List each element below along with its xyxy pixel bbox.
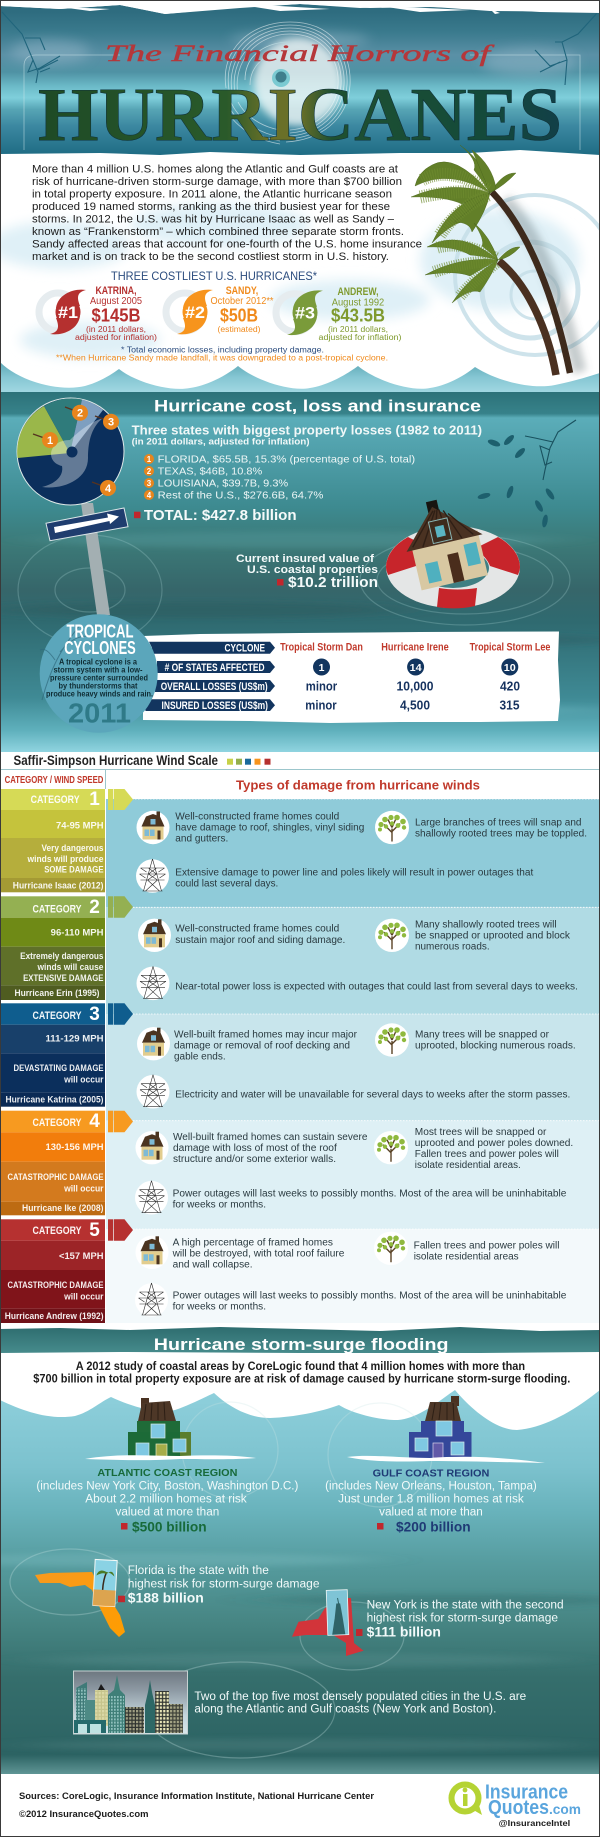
text block: populated cities: along the Atlantic and Gulf coasts (New York and Boston).: [194, 1704, 496, 1716]
panel: Katrina: [39, 285, 157, 342]
copyright: ©2012 InsuranceQuotes.com: [19, 1809, 148, 1819]
panel: category 5: [0, 1219, 600, 1326]
text: tree damage: shallowly rooted trees may be toppled.: [415, 828, 587, 839]
panel: footer: [0, 1774, 600, 1837]
text: power damage: [175, 867, 534, 889]
category 1 sidebar: SOME DAMAGE: [44, 865, 104, 875]
text: tree damage: [415, 1127, 573, 1171]
panel: storm-surge flooding: [0, 1323, 600, 1775]
category 5 sidebar: CATASTROPHIC DAMAGE: [8, 1280, 104, 1290]
category 2 sidebar: CATEGORY: [32, 903, 82, 915]
text: homes damage: and wall collapse.: [173, 1260, 253, 1271]
callout: insured value: [236, 553, 378, 591]
icon: sign post: [81, 503, 110, 615]
text: power damage: could last several days.: [175, 878, 278, 889]
table row: insured losses: [145, 697, 520, 712]
table row: insured losses: INSURED LOSSES (US$m): [162, 700, 268, 712]
category 2 sidebar: 96-110 MPH: [51, 928, 104, 938]
callout: insured value: Current insured value of: [236, 553, 374, 565]
panel: category 3: [0, 1003, 600, 1121]
category 3 sidebar: [0, 1003, 133, 1107]
top torn paper edge: [0, 0, 600, 14]
icon: cyclone overlay: [42, 418, 103, 488]
title script line: The Financial Horrors of: [105, 41, 496, 66]
text block: populated cities: Two of the top five most densely populated cities in the U.S. are: [194, 1691, 526, 1703]
panel: intro background: [0, 195, 600, 358]
icon: palm trees: [411, 145, 580, 375]
chart: pie of property losses: [17, 398, 124, 505]
pin 1: 1: [47, 435, 53, 447]
icon: house: [136, 1236, 168, 1269]
text: homes damage: Well-built framed homes can sustain severe: [173, 1132, 368, 1143]
text block: Gulf coast region: (includes New Orleans, Houston, Tampa): [325, 1481, 537, 1493]
logo: InsuranceQuotes: [452, 1781, 581, 1828]
text block: New York risk: [356, 1599, 564, 1640]
text block: three states: [132, 422, 482, 446]
category 3 sidebar: DEVASTATING DAMAGE: [14, 1063, 104, 1073]
text: homes damage: A high percentage of framed homes: [173, 1238, 333, 1249]
item 1: 1: [147, 455, 152, 464]
text block: New York risk: highest risk for storm-surge damage: [367, 1612, 558, 1624]
icon: house: [136, 1131, 168, 1164]
text block: introduction: Sandy affected areas that account for one-fourth of the U.S. home insurance: [32, 238, 422, 250]
heading: Saffir-Simpson wind scale: Saffir-Simpson Hurricane Wind Scale: [14, 753, 218, 768]
text block: introduction: market and is on track to be the second costliest storm in U.S. history.: [32, 251, 389, 263]
category 3 sidebar: Hurricane Katrina (2005): [6, 1095, 104, 1105]
panel: Andrew: adjusted for inflation): [318, 333, 402, 342]
category 2 sidebar: [0, 896, 133, 1000]
text block: introduction: More than 4 million U.S. homes along the Atlantic and Gulf coasts are at: [32, 164, 398, 176]
item 4: 4: [147, 491, 152, 500]
panel: wind scale white background: [0, 752, 600, 1332]
table row: overall losses: minor: [306, 679, 337, 694]
text: homes damage: damage with loss of most of the roof: [173, 1143, 337, 1154]
category 2 sidebar: winds will cause: [37, 962, 104, 972]
text block: Gulf coast region: valued at more than: [379, 1507, 483, 1519]
text: tree damage: Many trees will be snapped or: [415, 1029, 550, 1040]
text block: Gulf coast region: Just under 1.8 million homes at risk: [338, 1494, 524, 1506]
text: tree damage: Fallen trees and power poles will: [414, 1240, 560, 1251]
text: homes damage: Well-built framed homes may incur major: [174, 1029, 358, 1040]
item 2: 2: [147, 467, 152, 476]
text: tree damage: [415, 920, 571, 953]
table row: states affected: # OF STATES AFFECTED: [165, 662, 265, 674]
table row: cyclone: Tropical Storm Dan: [280, 642, 363, 654]
table row: cyclone: [149, 642, 550, 655]
text: homes damage: [173, 1132, 368, 1165]
logo: InsuranceQuotes: .com: [549, 1801, 581, 1817]
table row: cyclone: CYCLONE: [224, 643, 265, 655]
footnotes: [56, 345, 388, 363]
panel: Katrina: adjusted for inflation): [75, 333, 157, 342]
text: tree damage: [415, 1029, 576, 1051]
text: tree damage: uprooted and power poles downed.: [415, 1138, 573, 1149]
text block: Gulf coast region: GULF COAST REGION: [373, 1468, 489, 1480]
table row: insured losses: 4,500: [400, 697, 430, 712]
icon: power tower: [135, 1181, 168, 1214]
icon: branch right: [535, 12, 598, 85]
panel: tropical cyclones circle: A tropical cyclone is a: [59, 657, 138, 666]
text block: three states: Three states with biggest property losses (1982 to 2011): [132, 422, 482, 437]
text: homes damage: will be destroyed, with total roof failure: [172, 1249, 345, 1260]
category 4 sidebar: [0, 1111, 133, 1215]
category 5 sidebar: <157 MPH: [59, 1251, 104, 1261]
text block: Gulf coast region: [325, 1468, 537, 1535]
column heading: category and wind speed: CATEGORY / WIND SPEED: [5, 774, 104, 786]
icon: tree: [375, 919, 409, 952]
callout: insured value: $10.2 trillion: [288, 575, 378, 591]
text: power damage: [173, 1188, 567, 1210]
text: homes damage: Well-constructed frame homes could: [175, 924, 339, 935]
pin 3: 3: [108, 417, 114, 429]
heading: hurricane cost, loss and insurance: Hurricane cost, loss and insurance: [154, 397, 481, 416]
icon: blue flooded house: [347, 1396, 545, 1463]
icon: power tower: [135, 1283, 168, 1317]
text block: CoreLogic study: [33, 1361, 570, 1386]
panel: tropical cyclones circle: CYCLONES: [64, 638, 136, 658]
category 1 sidebar: CATEGORY: [31, 794, 80, 806]
text: power damage: Electricity and water will be unavailable for several days to weeks after the storm passes.: [175, 1090, 570, 1100]
panel: category 1: [0, 789, 600, 907]
panel: tropical cyclones circle: 2011: [68, 698, 131, 729]
text: homes damage: sustain major roof and siding damage.: [175, 935, 345, 946]
panel: Andrew: ANDREW,: [338, 286, 378, 298]
text: power damage: Power outages will last weeks to possibly months. Most of the area will be uninhabitable: [173, 1291, 567, 1302]
category 1 sidebar: winds will produce: [27, 854, 104, 864]
icon: house on life ring: [386, 491, 520, 608]
text: tree damage: isolate residential areas.: [415, 1160, 521, 1171]
icon: bent tree: [40, 625, 88, 700]
lower fronds: [425, 223, 520, 303]
category 4 sidebar: Hurricane Ike (2008): [22, 1203, 104, 1213]
item 1: FLORIDA, $65.5B, 15.3% (percentage of U.S. total): [158, 454, 415, 466]
title main: HURRICANES: [38, 73, 562, 157]
text block: Atlantic coast region: ATLANTIC COAST REGION: [97, 1467, 237, 1479]
text: tree damage: uprooted, blocking numerous roads.: [415, 1040, 576, 1051]
heading: three costliest hurricanes: THREE COSTLIEST U.S. HURRICANES*: [111, 269, 317, 283]
text: tree damage: [415, 817, 587, 839]
text block: Gulf coast region: $200 billion: [396, 1519, 471, 1535]
text: homes damage: Well-constructed frame homes could: [175, 812, 339, 822]
category 2 sidebar: 2: [89, 897, 100, 918]
pin 4: 4: [105, 483, 112, 495]
text block: Florida risk: Florida is the state with the: [128, 1565, 269, 1577]
sources: Sources: CoreLogic, Insurance Information Institute, National Hurricane Center: [19, 1791, 375, 1801]
text block: New York risk: New York is the state with the second: [367, 1599, 564, 1611]
category 5 sidebar: CATEGORY: [32, 1225, 82, 1237]
text: tree damage: [414, 1240, 560, 1262]
footnotes: * Total economic losses, including property damage.: [121, 345, 324, 354]
text block: introduction: known as “Frankenstorm” – which combined three separate storm fronts.: [32, 226, 404, 238]
icon: green hurricane #3: #3: [295, 304, 315, 323]
trunk rear: [492, 192, 570, 373]
category 2 sidebar: Extremely dangerous: [20, 951, 104, 961]
panel: category 4: [0, 1111, 600, 1229]
text: power damage: [173, 1291, 567, 1313]
text block: Atlantic coast region: valued at more than: [116, 1507, 219, 1519]
category 1 sidebar: Very dangerous: [42, 843, 104, 853]
icon: Florida map with photo: [35, 1559, 125, 1637]
icon: red hurricane #1: #1: [58, 303, 78, 322]
category 3 sidebar: 3: [89, 1004, 100, 1025]
heading: hurricane storm-surge flooding: Hurricane storm-surge flooding: [154, 1335, 449, 1354]
text: tree damage: isolate residential areas: [414, 1251, 519, 1262]
icon: background swirl: [455, 195, 600, 355]
text block: New York risk: $111 billion: [367, 1624, 441, 1640]
table row: states affected: [157, 658, 518, 676]
table row: overall losses: OVERALL LOSSES (US$m): [161, 681, 268, 693]
text: tree damage: Many shallowly rooted trees will: [415, 920, 557, 931]
category 4 sidebar: will occur: [63, 1183, 104, 1193]
text: power damage: for weeks or months.: [173, 1199, 266, 1210]
panel: Sandy: $50B: [220, 306, 258, 326]
panel: Katrina: August 2005: [90, 295, 142, 307]
text: homes damage: [175, 924, 345, 946]
item 3: 3: [147, 479, 152, 488]
table row: states affected: 14: [410, 662, 422, 674]
category 2 sidebar: Hurricane Erin (1995): [14, 988, 100, 998]
icon: orange hurricane #2: #2: [185, 303, 205, 322]
text block: introduction: produced 19 named storms, ranking as the third busiest year for these: [32, 201, 390, 213]
table row: insured losses: 315: [500, 697, 520, 712]
panel: tropical cyclones circle: storm system with a low-: [54, 666, 143, 674]
icon: power tower: [136, 859, 169, 893]
panel: Andrew: (in 2011 dollars,: [328, 325, 388, 334]
table row: states affected: 10: [504, 662, 516, 674]
text: homes damage: damage or removal of roof decking and: [174, 1040, 350, 1051]
trunk front: [499, 261, 556, 375]
text block: CoreLogic study: $700 billion in total property exposure are at risk of damage caused by hurricane storm-surge flooding.: [33, 1374, 570, 1386]
icon: power tower: [136, 966, 170, 1000]
category 1 sidebar: 1: [89, 789, 100, 810]
category 3 sidebar: CATEGORY: [32, 1010, 82, 1022]
text block: Atlantic coast region: $500 billion: [132, 1519, 207, 1535]
category 4 sidebar: 130-156 MPH: [46, 1142, 104, 1152]
upper fronds: [411, 145, 516, 243]
category 1 sidebar: 74-95 MPH: [56, 820, 104, 830]
panel: Katrina: KATRINA,: [96, 285, 136, 297]
panel: Katrina: (in 2011 dollars,: [86, 325, 146, 334]
panel: Sandy: (estimated): [218, 325, 261, 334]
callout: insured value: U.S. coastal properties: [247, 564, 378, 576]
text block: CoreLogic study: A 2012 study of coastal areas by CoreLogic found that 4 million homes with more than: [76, 1361, 525, 1373]
panel: tropical cyclones circle: produce heavy winds and rain.: [46, 690, 153, 698]
text: power damage: for weeks or months.: [173, 1302, 266, 1313]
icon: green flooded house: [85, 1398, 256, 1460]
icon: house: [138, 919, 171, 952]
panel: tropical cyclones circle: by thunderstorms that: [58, 682, 138, 690]
text: homes damage: have damage to roof, shingles, vinyl siding: [175, 822, 364, 834]
logo: InsuranceQuotes: Insurance: [485, 1781, 568, 1803]
category 2 sidebar: EXTENSIVE DAMAGE: [23, 973, 104, 983]
category 5 sidebar: 5: [89, 1220, 100, 1241]
panel: tropical cyclones circle: [40, 614, 158, 733]
legend list: [144, 454, 415, 502]
category 3 sidebar: will occur: [63, 1074, 104, 1084]
icon: hurricane eye: [272, 69, 290, 87]
icon: hurricane swirl: [222, 22, 350, 144]
table row: insured losses: minor: [305, 697, 337, 712]
icon: tree: [375, 1023, 409, 1057]
item 3: LOUISIANA, $39.7B, 9.3%: [158, 478, 288, 490]
category 4 sidebar: CATEGORY: [32, 1117, 82, 1129]
column heading: types of damage: Types of damage from hurricane winds: [236, 777, 480, 792]
icon: tree: [374, 1232, 408, 1265]
house: [397, 491, 492, 592]
panel: Katrina: $145B: [92, 306, 140, 326]
text: tree damage: be snapped or uprooted and block: [415, 931, 571, 942]
icon: branch: [525, 420, 576, 480]
ripples: [10, 1402, 432, 1758]
footnotes: **When Hurricane Sandy made landfall, it was downgraded to a post-tropical cyclone.: [56, 354, 388, 363]
panel: Sandy: SANDY,: [226, 285, 258, 297]
ripples: [18, 535, 570, 645]
text block: populated cities: [194, 1691, 526, 1716]
icon: power tower: [136, 1075, 170, 1108]
trunk shadow: [505, 200, 580, 372]
text: homes damage: and gutters.: [175, 834, 228, 844]
panel: category 2: [0, 896, 600, 1014]
text block: Florida risk: [118, 1565, 320, 1606]
panel: tropical cyclones circle: TROPICAL: [66, 622, 134, 642]
text block: introduction: storms. In 2012, the U.S. was hit by Hurricane Isaac as well as Sandy –: [32, 213, 395, 225]
icon: New York map with photo: [292, 1590, 364, 1656]
panel: tropical cyclones table: [143, 632, 560, 723]
water streaks: [0, 1553, 600, 1751]
text: tree damage: Most trees will be snapped or: [415, 1127, 547, 1138]
text block: Atlantic coast region: About 2.2 million homes at risk: [85, 1494, 247, 1506]
table row: overall losses: [155, 679, 520, 694]
panel: Sandy: [166, 285, 274, 334]
logo: InsuranceQuotes: Quotes: [488, 1797, 549, 1819]
text: power damage: Near-total power loss is expected with outages that could last from several days to weeks.: [175, 982, 578, 993]
category 5 sidebar: Hurricane Andrew (1992): [5, 1311, 104, 1321]
pin 2: 2: [77, 408, 83, 420]
text: homes damage: [172, 1238, 345, 1271]
text block: introduction: in total property exposure. In 2011 alone, the Atlantic hurricane season: [32, 188, 392, 200]
water streaks: [0, 532, 600, 715]
icons: flying leaves: [477, 433, 556, 528]
text: power damage: Power outages will last weeks to possibly months. Most of the area will be uninhabitable: [173, 1188, 567, 1199]
table row: states affected: 1: [319, 662, 325, 674]
table row: overall losses: 420: [500, 679, 520, 694]
panel: Andrew: August 1992: [332, 296, 384, 308]
panel: header band: [0, 4, 600, 157]
frame lines: [24, 55, 580, 150]
text block: introduction: [32, 164, 422, 263]
category 4 sidebar: CATASTROPHIC DAMAGE: [8, 1172, 104, 1182]
icon: house: [136, 811, 170, 844]
table row: overall losses: 10,000: [396, 679, 434, 694]
text: power damage: Extensive damage to power line and poles likely will result in power outages that: [175, 867, 534, 878]
table row: cyclone: Hurricane Irene: [381, 642, 449, 654]
text block: Florida risk: $188 billion: [128, 1590, 204, 1606]
item 4: Rest of the U.S., $276.6B, 64.7%: [158, 490, 323, 502]
text: homes damage: structure and/or some exterior walls.: [173, 1154, 336, 1165]
text block: Florida risk: highest risk for storm-surge damage: [128, 1578, 320, 1590]
icon: city skyline: [74, 1671, 188, 1734]
category 3 sidebar: 111-129 MPH: [46, 1034, 104, 1044]
category 1 sidebar: [0, 789, 133, 892]
text: homes damage: gable ends.: [174, 1051, 226, 1062]
text: homes damage: [174, 1029, 358, 1062]
item 2: TEXAS, $46B, 10.8%: [158, 466, 262, 478]
text block: Atlantic coast region: [36, 1467, 299, 1535]
icon: branch left: [2, 12, 60, 83]
category 4 sidebar: 4: [89, 1111, 100, 1132]
text block: three states: (in 2011 dollars, adjusted for inflation): [132, 436, 310, 446]
panel: cost, loss and insurance water: [0, 362, 600, 752]
icon: tree: [375, 811, 409, 844]
text block: introduction: risk of hurricane-driven storm-surge damage, with more than $700 billion: [32, 176, 402, 188]
icon: arrow sign: [46, 508, 128, 541]
table row: cyclone: Tropical Storm Lee: [470, 642, 550, 654]
text: homes damage: [175, 812, 364, 844]
panel: Andrew: [276, 286, 402, 342]
panel: Andrew: $43.5B: [331, 306, 385, 326]
category 1 sidebar: Hurricane Isaac (2012): [13, 881, 104, 891]
category 5 sidebar: [0, 1219, 133, 1323]
panel: Sandy: October 2012**: [210, 295, 274, 307]
icon: tree: [374, 1131, 408, 1164]
cloud texture: [10, 32, 578, 76]
text: tree damage: Large branches of trees will snap and: [415, 817, 582, 828]
text: tree damage: Fallen trees and power poles will: [415, 1149, 559, 1160]
icon: house: [137, 1027, 170, 1060]
panel: tropical cyclones circle: pressure center surrounded: [50, 674, 148, 682]
category 5 sidebar: will occur: [63, 1291, 104, 1301]
logo: InsuranceQuotes: @InsuranceIntel: [499, 1818, 570, 1828]
total: TOTAL: $427.8 billion: [144, 507, 297, 524]
text: tree damage: numerous roads.: [415, 942, 490, 953]
text block: Atlantic coast region: (includes New York City, Boston, Washington D.C.): [36, 1481, 299, 1493]
